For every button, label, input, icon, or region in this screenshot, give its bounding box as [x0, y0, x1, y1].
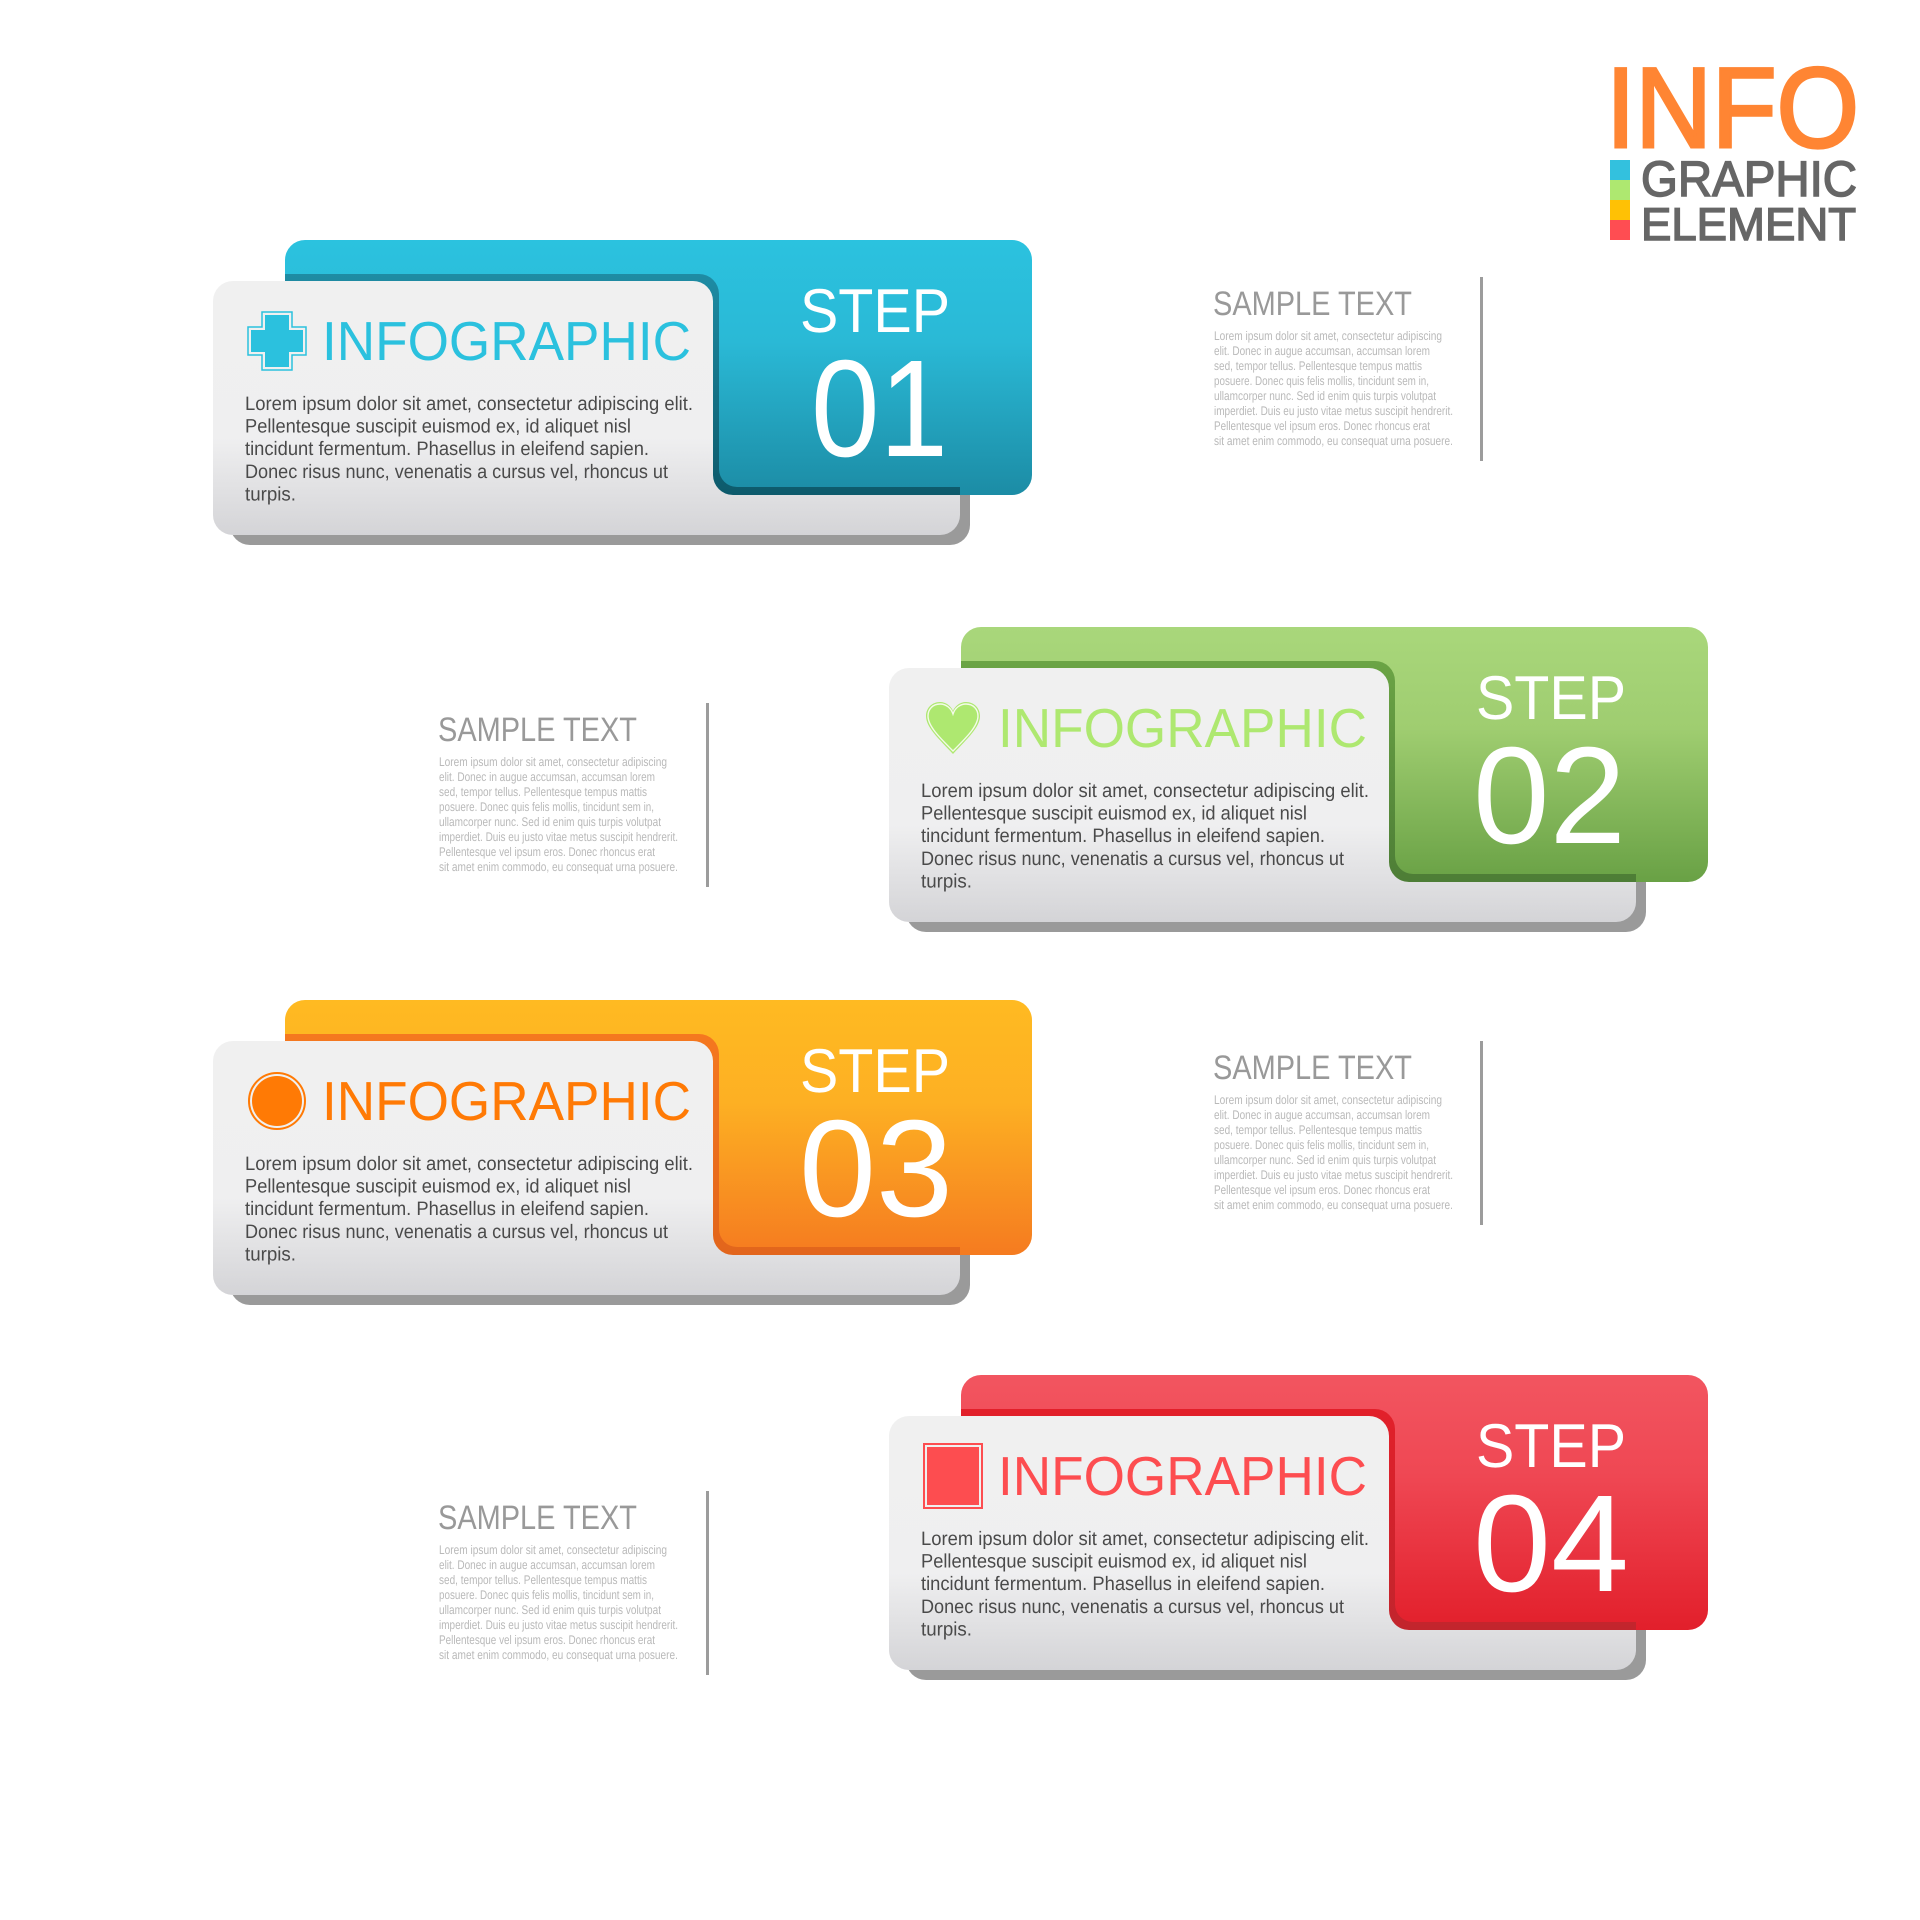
body text: Pellentesque suscipit euismod ex, id aliquet nisl [245, 416, 631, 438]
body text [245, 1153, 693, 1265]
tab dark edge [961, 647, 1676, 882]
side paragraph: sed, tempor tellus. Pellentesque tempus mattis [439, 785, 647, 799]
tab dark edge [285, 1020, 1000, 1255]
side paragraph: posuere. Donec quis felis mollis, tincidunt sem in, [1214, 1138, 1429, 1152]
side paragraph: Lorem ipsum dolor sit amet, consectetur adipiscing [1214, 1093, 1442, 1107]
side paragraph: elit. Donec in augue accumsan, accumsan lorem [1214, 344, 1430, 358]
side paragraph [1214, 1093, 1453, 1212]
side paragraph: ullamcorper nunc. Sed id enim quis turpis volutpat [439, 815, 661, 829]
body text: Lorem ipsum dolor sit amet, consectetur adipiscing elit. [245, 1153, 693, 1175]
step number: 04 [1473, 1467, 1629, 1621]
card shadow [906, 1435, 1646, 1680]
step label: STEP [1476, 664, 1626, 733]
body text: Pellentesque suscipit euismod ex, id aliquet nisl [921, 803, 1307, 825]
coloured tab [285, 240, 1032, 495]
side heading: SAMPLE TEXT [1213, 1049, 1412, 1087]
body text [921, 1528, 1369, 1640]
side paragraph: imperdiet. Duis eu justo vitae metus suscipit hendrerit. [439, 830, 678, 844]
step label: STEP [1476, 1412, 1626, 1481]
side paragraph [439, 755, 678, 874]
body text: turpis. [245, 483, 296, 505]
side paragraph: ullamcorper nunc. Sed id enim quis turpis volutpat [1214, 389, 1436, 403]
side paragraph: posuere. Donec quis felis mollis, tincidunt sem in, [439, 1588, 654, 1602]
body text: Donec risus nunc, venenatis a cursus vel, rhoncus ut [245, 461, 669, 483]
step label: STEP [800, 1037, 950, 1106]
side paragraph: imperdiet. Duis eu justo vitae metus suscipit hendrerit. [1214, 1168, 1453, 1182]
body text: tincidunt fermentum. Phasellus in eleifend sapien. [245, 1198, 649, 1220]
tab dark edge [285, 260, 1000, 495]
side paragraph: Lorem ipsum dolor sit amet, consectetur adipiscing [439, 1543, 667, 1557]
card shadow [906, 687, 1646, 932]
side heading: SAMPLE TEXT [438, 711, 637, 749]
step number: 03 [799, 1092, 953, 1246]
icon: square [924, 1444, 982, 1508]
logo colour bar [1610, 160, 1630, 240]
side paragraph: Pellentesque vel ipsum eros. Donec rhoncus erat [439, 1633, 655, 1647]
side paragraph: ullamcorper nunc. Sed id enim quis turpis volutpat [1214, 1153, 1436, 1167]
side note 4 [438, 1491, 709, 1675]
side paragraph: posuere. Donec quis felis mollis, tincidunt sem in, [1214, 374, 1429, 388]
side paragraph [1214, 329, 1453, 448]
side paragraph: posuere. Donec quis felis mollis, tincidunt sem in, [439, 800, 654, 814]
side paragraph: sed, tempor tellus. Pellentesque tempus mattis [1214, 359, 1422, 373]
body text: Pellentesque suscipit euismod ex, id aliquet nisl [921, 1551, 1307, 1573]
side paragraph: Pellentesque vel ipsum eros. Donec rhoncus erat [1214, 1183, 1430, 1197]
side paragraph: elit. Donec in augue accumsan, accumsan lorem [1214, 1108, 1430, 1122]
logo word: INFO: INFO [1606, 45, 1859, 172]
side paragraph: sit amet enim commodo, eu consequat urna posuere. [1214, 1198, 1453, 1212]
heading: INFOGRAPHIC [322, 310, 691, 372]
body text: tincidunt fermentum. Phasellus in eleifend sapien. [921, 1573, 1325, 1595]
body text: Donec risus nunc, venenatis a cursus vel, rhoncus ut [921, 848, 1345, 870]
grey card [213, 281, 960, 535]
side paragraph: sit amet enim commodo, eu consequat urna posuere. [1214, 434, 1453, 448]
logo: info graphic element [1606, 45, 1859, 250]
body text: Donec risus nunc, venenatis a cursus vel, rhoncus ut [245, 1221, 669, 1243]
logo word: ELEMENT: ELEMENT [1641, 198, 1856, 250]
body text: turpis. [921, 870, 972, 892]
side note 2 [438, 703, 709, 887]
body text: Donec risus nunc, venenatis a cursus vel, rhoncus ut [921, 1596, 1345, 1618]
body text: Pellentesque suscipit euismod ex, id aliquet nisl [245, 1176, 631, 1198]
icon: cross [248, 312, 306, 370]
side heading: SAMPLE TEXT [1213, 285, 1412, 323]
icon: circle [249, 1073, 305, 1129]
side paragraph: Lorem ipsum dolor sit amet, consectetur adipiscing [1214, 329, 1442, 343]
side paragraph: Pellentesque vel ipsum eros. Donec rhoncus erat [439, 845, 655, 859]
body text: Lorem ipsum dolor sit amet, consectetur adipiscing elit. [921, 1528, 1369, 1550]
side paragraph: elit. Donec in augue accumsan, accumsan lorem [439, 1558, 655, 1572]
card shadow [230, 1060, 970, 1305]
logo word: GRAPHIC: GRAPHIC [1641, 151, 1857, 207]
side paragraph: ullamcorper nunc. Sed id enim quis turpis volutpat [439, 1603, 661, 1617]
body text [245, 393, 693, 505]
side paragraph: sit amet enim commodo, eu consequat urna posuere. [439, 860, 678, 874]
side paragraph: sed, tempor tellus. Pellentesque tempus mattis [439, 1573, 647, 1587]
side heading: SAMPLE TEXT [438, 1499, 637, 1537]
icon: heart [926, 702, 980, 754]
side paragraph: imperdiet. Duis eu justo vitae metus suscipit hendrerit. [439, 1618, 678, 1632]
side paragraph: elit. Donec in augue accumsan, accumsan lorem [439, 770, 655, 784]
side paragraph: sed, tempor tellus. Pellentesque tempus mattis [1214, 1123, 1422, 1137]
heading: INFOGRAPHIC [998, 1445, 1367, 1507]
card shadow [230, 300, 970, 545]
body text: tincidunt fermentum. Phasellus in eleifend sapien. [245, 438, 649, 460]
side paragraph: Lorem ipsum dolor sit amet, consectetur adipiscing [439, 755, 667, 769]
side note 3 [1213, 1041, 1483, 1225]
side paragraph: Pellentesque vel ipsum eros. Donec rhoncus erat [1214, 419, 1430, 433]
body text: Lorem ipsum dolor sit amet, consectetur adipiscing elit. [245, 393, 693, 415]
tab dark edge [961, 1395, 1676, 1630]
panel: step 04 [889, 1375, 1708, 1680]
side paragraph: imperdiet. Duis eu justo vitae metus suscipit hendrerit. [1214, 404, 1453, 418]
body text: turpis. [921, 1618, 972, 1640]
panel: step 02 [889, 627, 1708, 932]
grey card [889, 668, 1636, 922]
coloured tab [961, 627, 1708, 882]
grey card [889, 1416, 1636, 1670]
heading: INFOGRAPHIC [322, 1070, 691, 1132]
body text: tincidunt fermentum. Phasellus in eleifend sapien. [921, 825, 1325, 847]
coloured tab [961, 1375, 1708, 1630]
coloured tab [285, 1000, 1032, 1255]
side paragraph: sit amet enim commodo, eu consequat urna posuere. [439, 1648, 678, 1662]
grey card [213, 1041, 960, 1295]
panel: step 01 [213, 240, 1032, 545]
side paragraph [439, 1543, 678, 1662]
step label: STEP [800, 277, 950, 346]
step number: 01 [811, 332, 948, 486]
step number: 02 [1473, 719, 1626, 873]
panel: step 03 [213, 1000, 1032, 1305]
side note 1 [1213, 277, 1483, 461]
body text [921, 780, 1369, 892]
body text: Lorem ipsum dolor sit amet, consectetur adipiscing elit. [921, 780, 1369, 802]
heading: INFOGRAPHIC [998, 697, 1367, 759]
body text: turpis. [245, 1243, 296, 1265]
